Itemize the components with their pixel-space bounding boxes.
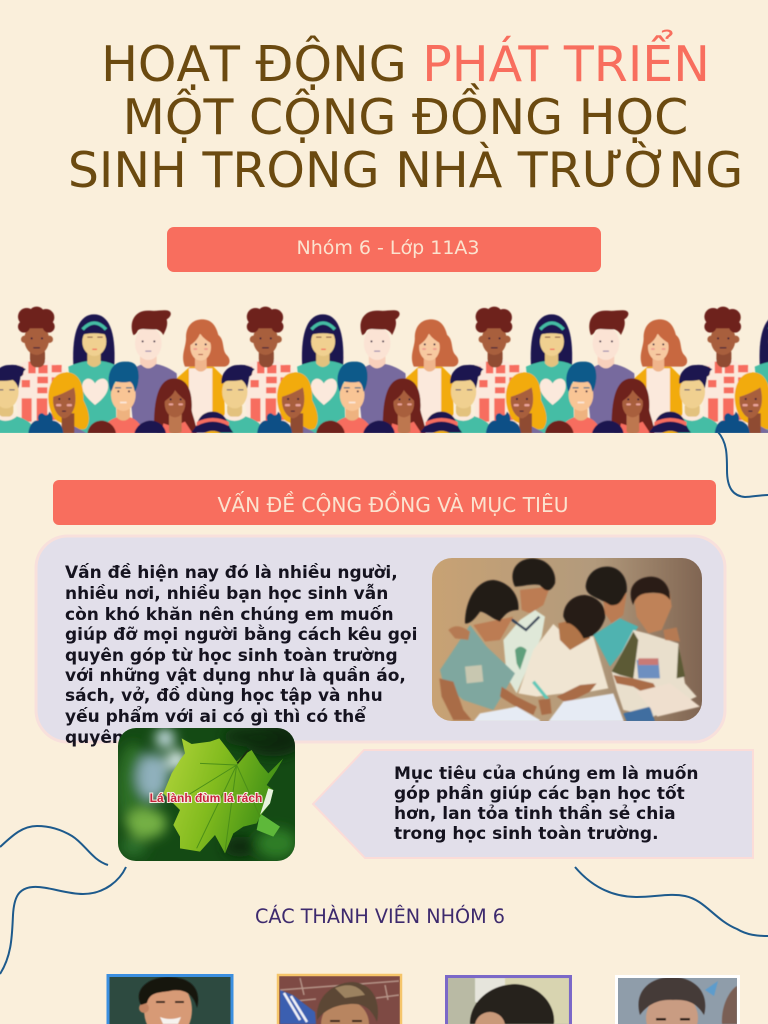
group label button: Nhóm 6 - Lớp 11A3	[296, 237, 480, 259]
panel: objective arrow callout	[313, 750, 753, 858]
paper, books, jeans	[548, 693, 624, 722]
group label button	[167, 227, 601, 272]
title: MỘT CỘNG ĐỒNG HỌC	[123, 82, 688, 146]
problem text block	[65, 562, 417, 748]
problem text block: với những vật dụng như là quần áo,	[65, 665, 406, 686]
title: HOẠT ĐỘNG PHÁT TRIỂN	[101, 28, 710, 93]
problem text block: yếu phẩm với ai có gì thì có thể	[65, 705, 366, 727]
problem text block: quyên góp.	[65, 728, 172, 748]
illustration: crowd of people	[0, 307, 768, 434]
kid D	[593, 618, 638, 667]
kid E	[612, 630, 697, 717]
kid B	[503, 610, 545, 693]
problem text block: Vấn đề hiện nay đó là nhiều người,	[65, 562, 398, 583]
decorative waves lower	[0, 826, 126, 974]
objective text block: hơn, lan tỏa tinh thần sẻ chia	[394, 803, 676, 824]
problem text block: nhiều nơi, nhiều bạn học sinh vẫn	[65, 582, 388, 604]
title	[68, 28, 743, 199]
problem text block: còn khó khăn nên chúng em muốn	[65, 604, 394, 625]
objective text block: Mục tiêu của chúng em là muốn	[394, 763, 699, 784]
member photo 1	[108, 976, 232, 1024]
member photo 4	[616, 976, 738, 1024]
title: SINH TRONG NHÀ TRƯỜNG	[68, 140, 743, 199]
problem text block: giúp đỡ mọi người bằng cách kêu gọi	[65, 624, 417, 645]
panel: community problem	[36, 536, 725, 748]
photo: green leaf with proverb	[117, 723, 303, 861]
member photo 3	[446, 976, 570, 1024]
member photo 2	[278, 975, 401, 1024]
problem text block: sách, vở, đồ dùng học tập và nhu	[65, 685, 383, 706]
proverb caption: Lá lành đùm lá rách	[150, 791, 262, 805]
section heading bar: VẤN ĐỀ CỘNG ĐỒNG VÀ MỤC TIÊU	[217, 491, 569, 517]
kid C	[518, 624, 608, 697]
problem text block: quyên góp từ học sinh toàn trường	[65, 646, 398, 666]
decorative wave top right	[718, 432, 768, 497]
objective text block: trong học sinh toàn trường.	[394, 824, 659, 844]
objective text block	[394, 763, 699, 844]
members heading: CÁC THÀNH VIÊN NHÓM 6	[255, 904, 505, 928]
objective text block: góp phần giúp các bạn học tốt	[394, 783, 685, 804]
kid A	[440, 625, 515, 710]
section heading bar	[53, 480, 716, 525]
photo: children reading together	[432, 558, 702, 722]
